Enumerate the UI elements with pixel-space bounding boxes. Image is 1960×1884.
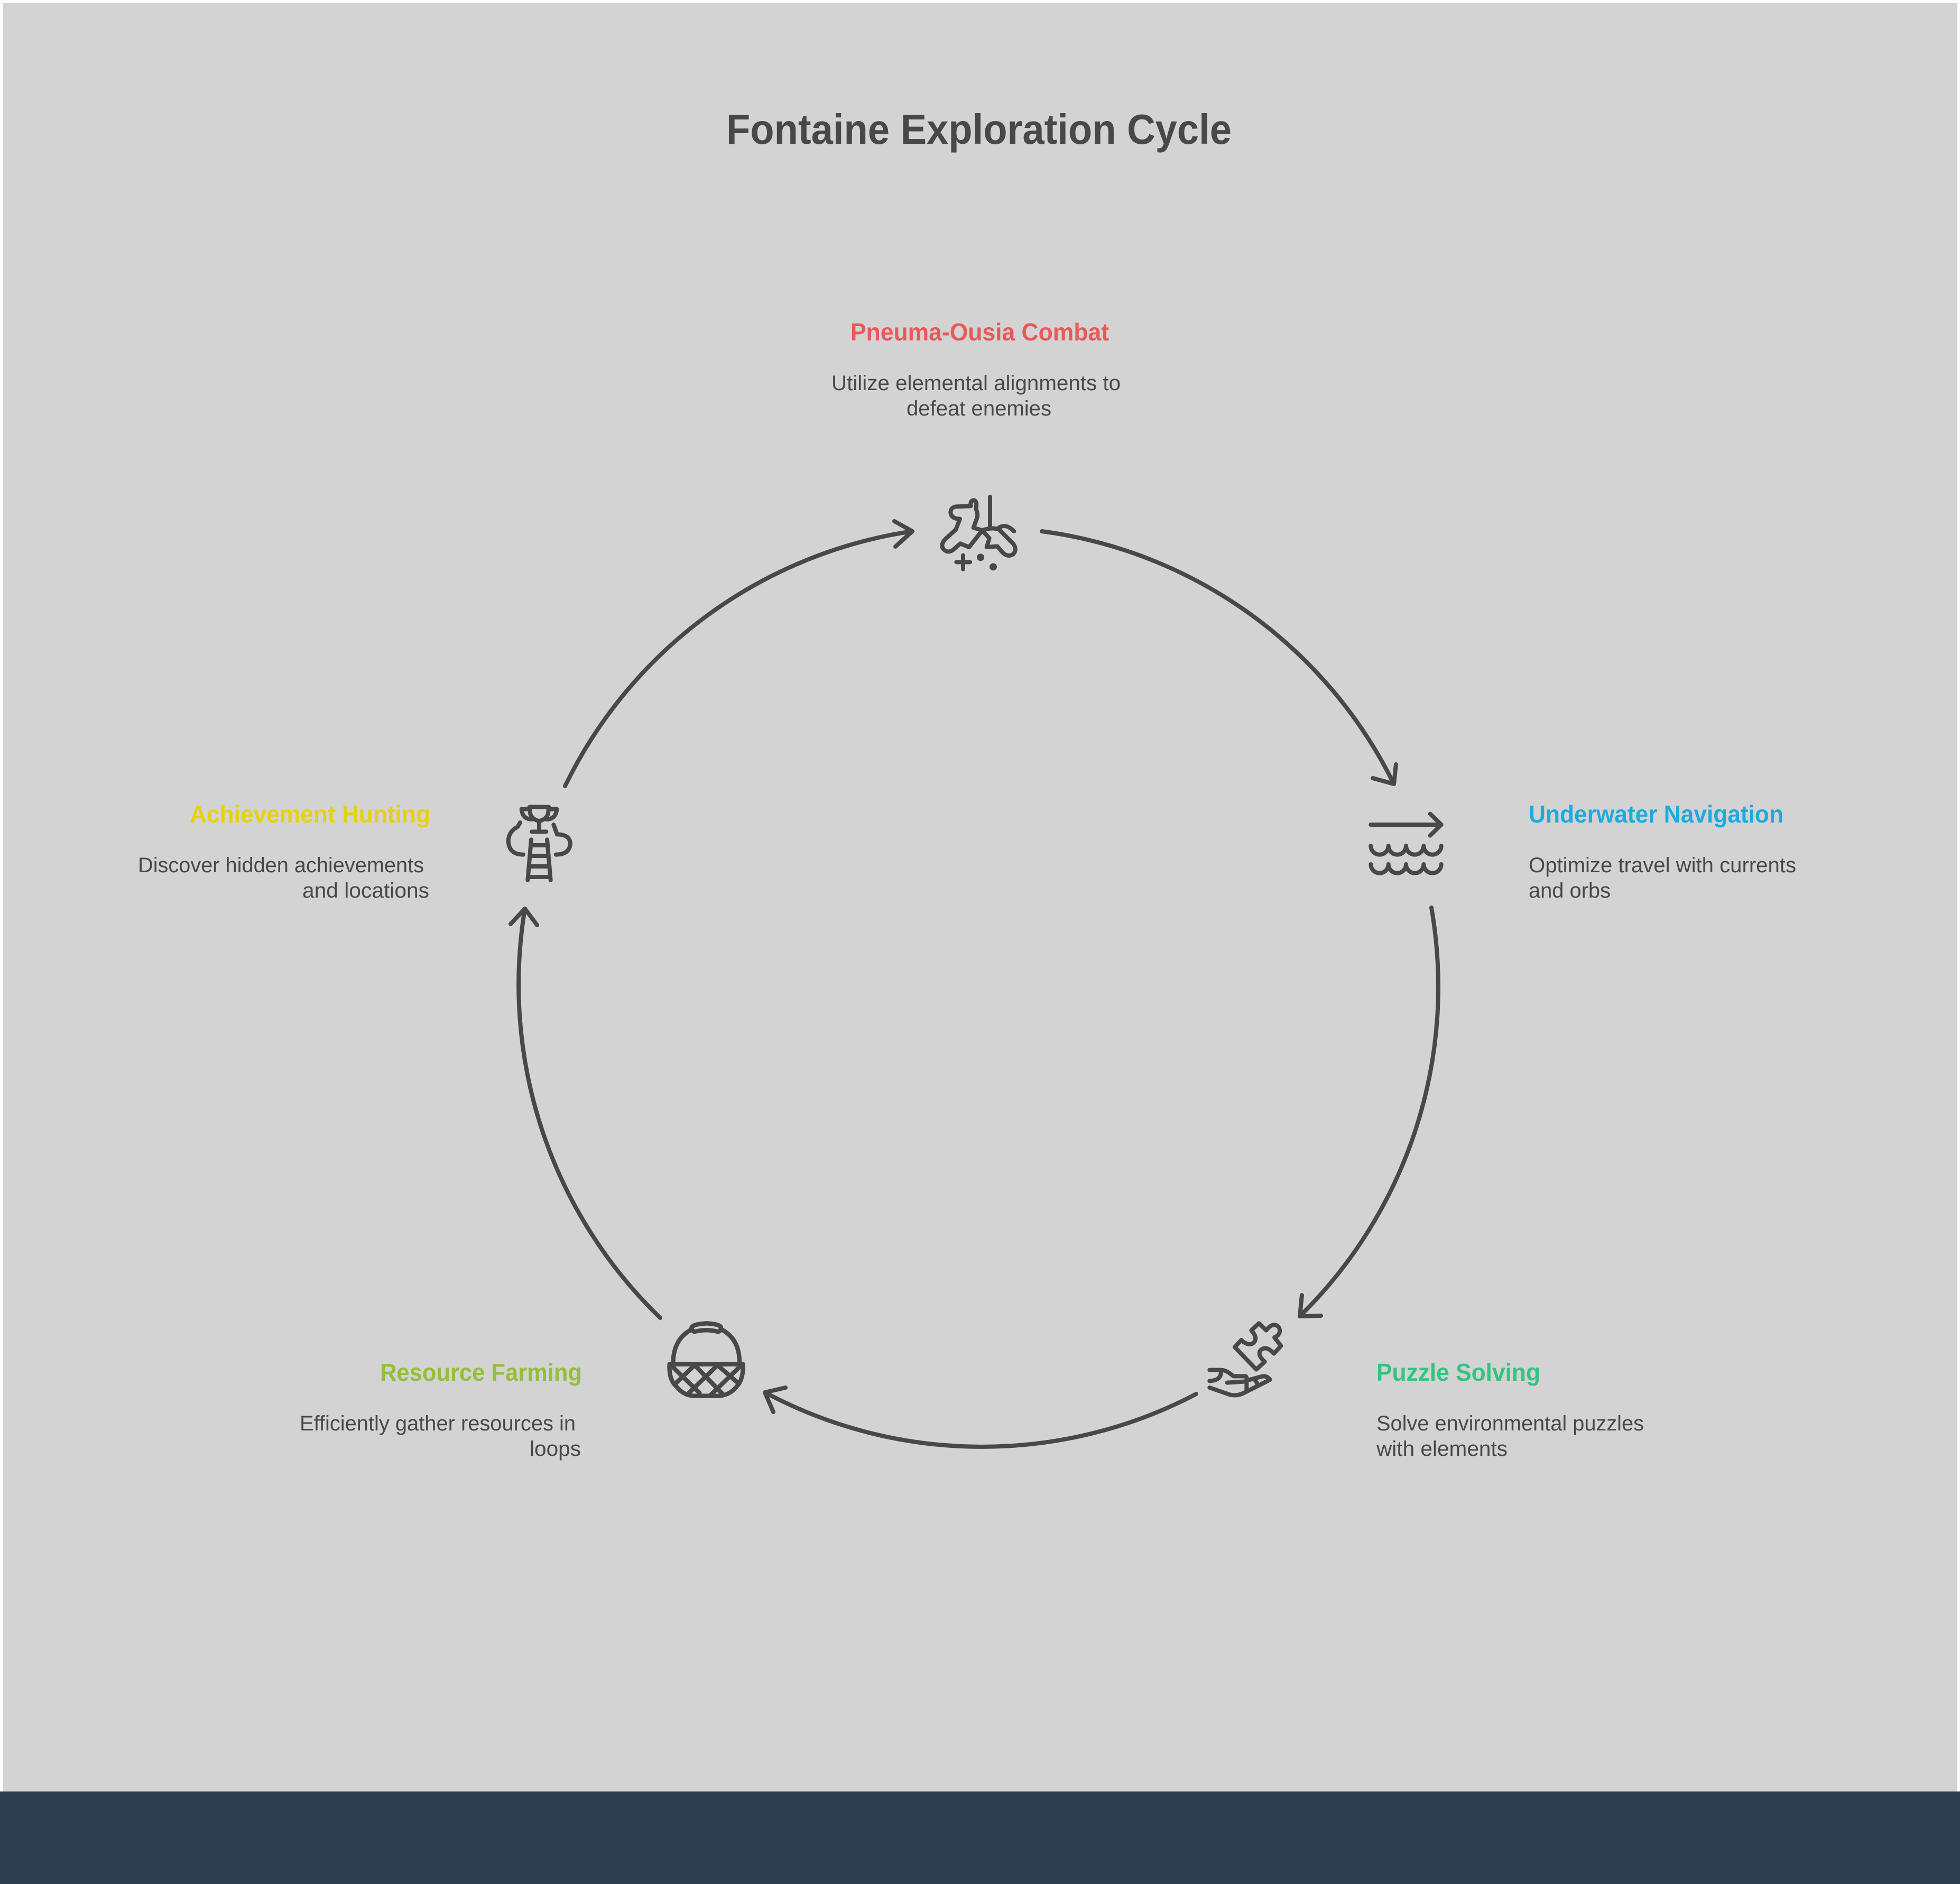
label: Achievement Hunting: Achievement Hunting <box>190 800 430 828</box>
arrow: farming to achievements <box>511 909 660 1318</box>
label: Resource Farming: loops <box>530 1437 581 1461</box>
label: Achievement Hunting: and locations <box>302 879 429 902</box>
label: Resource Farming: Efficiently gather resources in <box>300 1412 576 1435</box>
label: Pneuma-Ousia Combat: Utilize elemental alignments to <box>831 372 1121 395</box>
label: Pneuma-Ousia Combat <box>831 318 1121 420</box>
label: Puzzle Solving <box>1376 1359 1644 1461</box>
label: Resource Farming <box>300 1359 582 1461</box>
label: Puzzle Solving: Puzzle Solving <box>1376 1359 1540 1386</box>
arrow: navigation to puzzle <box>1300 908 1438 1316</box>
label: Underwater Navigation: Optimize travel with currents <box>1529 854 1796 877</box>
label: Underwater Navigation: Underwater Navigation <box>1529 800 1783 828</box>
icon: arrow over waves <box>1371 814 1441 873</box>
arrow: puzzle to farming <box>765 1388 1196 1447</box>
label: Puzzle Solving: with elements <box>1376 1437 1508 1461</box>
label: Puzzle Solving: Solve environmental puzzles <box>1376 1412 1644 1435</box>
icon: combat figures <box>942 497 1015 570</box>
arrow: combat to navigation <box>1042 531 1396 784</box>
label: Resource Farming: Resource Farming <box>380 1359 582 1386</box>
label: Achievement Hunting: Discover hidden achievements <box>138 854 424 877</box>
label: Underwater Navigation <box>1529 800 1796 902</box>
footer band <box>0 1791 1960 1884</box>
icon: basket <box>669 1323 743 1396</box>
icon: puzzle piece over hand <box>1209 1323 1281 1395</box>
label: Pneuma-Ousia Combat: defeat enemies <box>907 397 1051 420</box>
arrow: achievements to combat <box>565 521 912 786</box>
label: Achievement Hunting <box>138 800 430 902</box>
label: Pneuma-Ousia Combat: Pneuma-Ousia Combat <box>850 318 1109 346</box>
title: Fontaine Exploration Cycle <box>726 106 1232 153</box>
icon: trophy and ladder <box>509 807 570 880</box>
label: Underwater Navigation: and orbs <box>1529 879 1611 902</box>
